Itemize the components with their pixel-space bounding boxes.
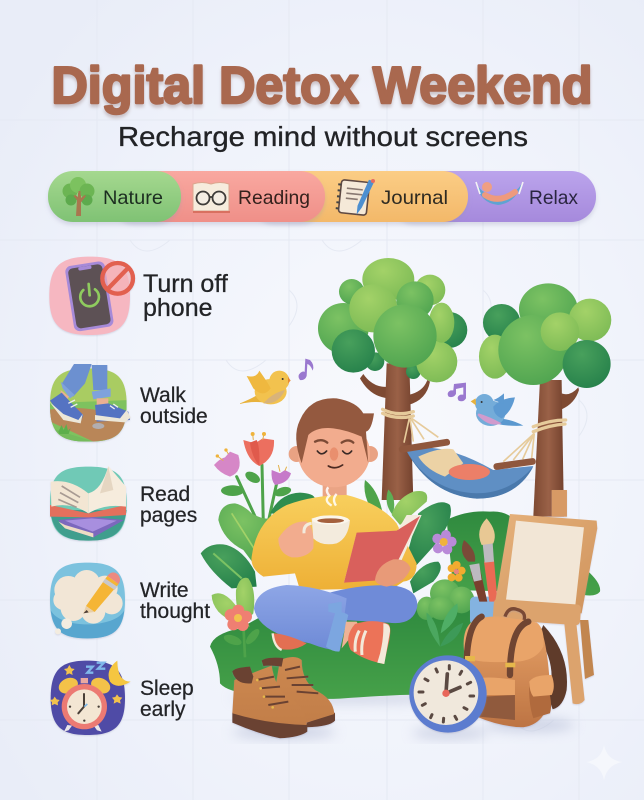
brushes and cup <box>462 518 498 625</box>
pill: journal: Journal <box>381 187 448 209</box>
label: write thought: thought <box>140 600 210 623</box>
tree: right <box>479 283 611 517</box>
pill: reading: Reading <box>238 187 310 209</box>
person: body <box>251 487 422 664</box>
pill: journal <box>250 171 468 222</box>
bird: blue <box>471 393 523 426</box>
illustration: relaxing scene <box>201 258 611 739</box>
grass tuft <box>426 603 463 647</box>
label: walk outside: Walk <box>140 384 186 407</box>
label: turn off phone: phone <box>143 294 213 322</box>
flower: pink foreground <box>222 605 262 657</box>
boots <box>232 657 335 738</box>
icon: open book stack <box>50 466 127 541</box>
sparkle watermark <box>586 745 622 780</box>
icon: phone with prohibition sign <box>49 257 133 335</box>
step 3: read pages <box>50 466 197 541</box>
pill: reading <box>110 171 325 222</box>
backpack <box>464 609 567 727</box>
step 4: write thought <box>50 563 210 638</box>
category pill bar <box>48 171 596 222</box>
tree: left <box>318 258 467 500</box>
music note: purple single <box>298 359 313 380</box>
step 2: walk outside <box>47 364 208 443</box>
clock <box>409 655 487 733</box>
plants: left tulips <box>214 432 315 523</box>
back bush <box>447 511 600 595</box>
step 5: sleep early <box>50 661 194 735</box>
icon: walking legs <box>47 364 131 443</box>
pill: relax: Relax <box>529 187 578 209</box>
label: walk outside: outside <box>140 405 208 428</box>
hammock <box>383 409 566 499</box>
label: turn off phone: Turn off <box>143 270 228 298</box>
music note: purple double <box>448 383 466 401</box>
label: read pages: Read <box>140 483 190 506</box>
soft ground shadows <box>230 693 575 739</box>
icon: thought cloud and pencil <box>50 563 125 638</box>
label: sleep early: Sleep <box>140 677 194 700</box>
label: sleep early: early <box>140 698 186 721</box>
label: read pages: pages <box>140 504 197 527</box>
label: write thought: Write <box>140 579 189 602</box>
pill: relax <box>390 171 596 222</box>
easel with canvas <box>493 490 597 704</box>
hair and head <box>289 398 378 502</box>
plants: leaves left and right of person <box>201 480 474 627</box>
step 1: turn off phone <box>49 257 228 335</box>
icon: alarm clock at night <box>50 661 131 735</box>
bird: yellow <box>240 371 291 404</box>
title: Digital Detox Weekend <box>52 57 592 115</box>
subtitle: Recharge mind without screens <box>118 121 528 152</box>
flowers: purple and orange <box>432 530 466 582</box>
pill: nature: Nature <box>103 187 163 209</box>
pill: nature <box>48 171 181 222</box>
ground <box>210 607 477 699</box>
